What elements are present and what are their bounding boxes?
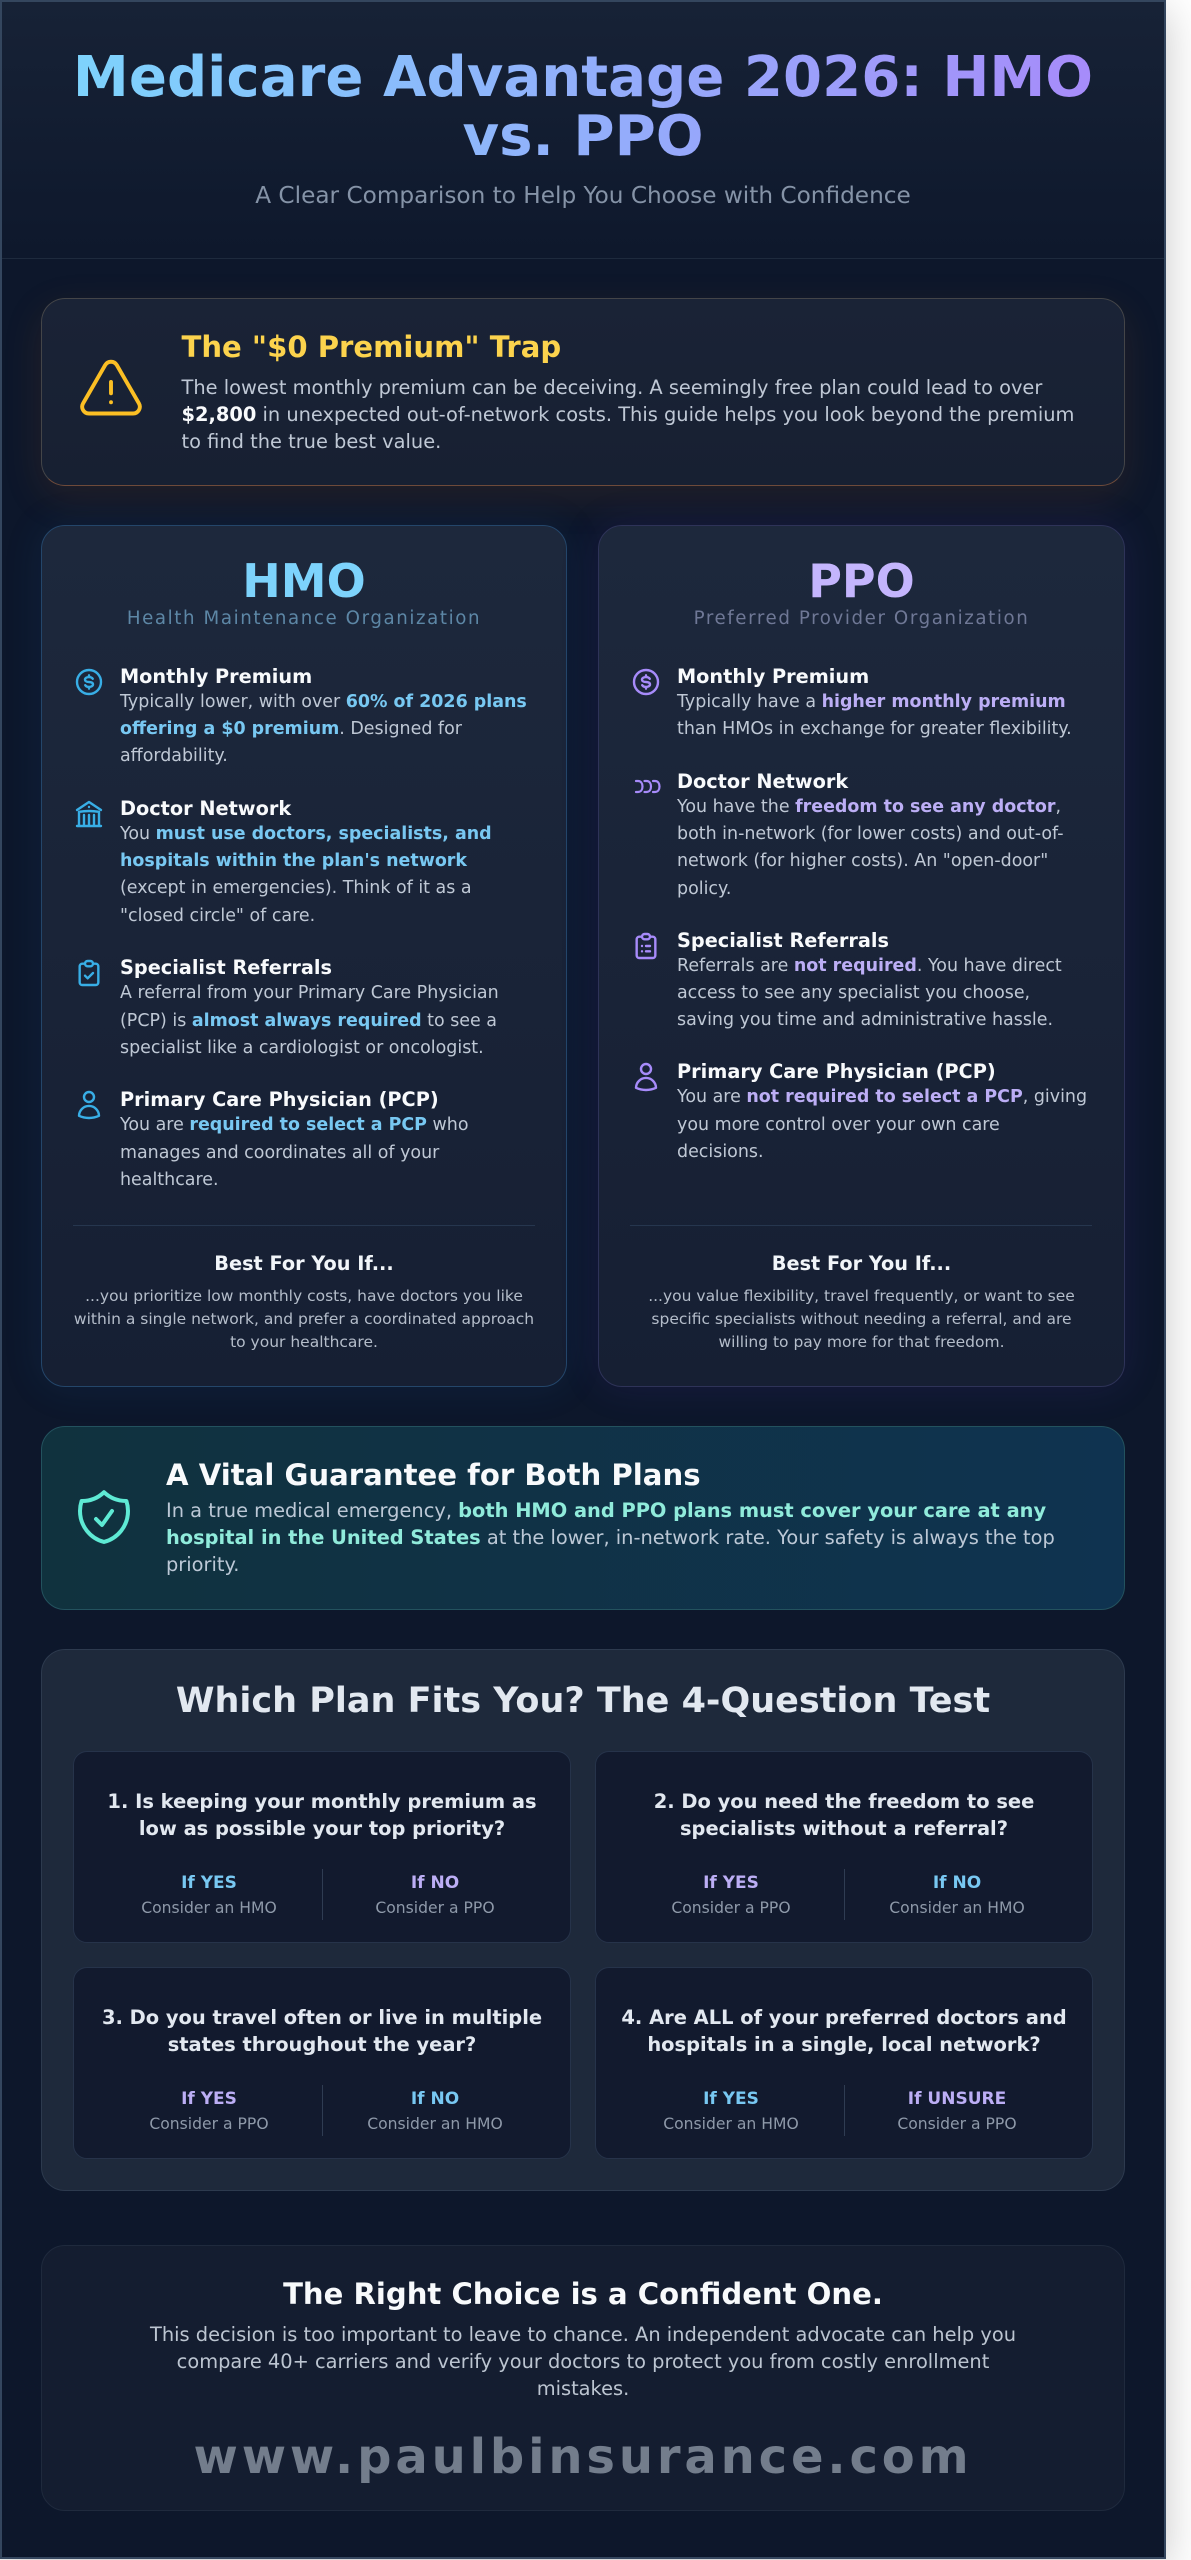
- answer: yes: Consider an HMO: [663, 2114, 799, 2132]
- item text: offering a $0 premium. Designed for: [120, 719, 462, 739]
- item title: Monthly Premium: [677, 664, 869, 688]
- item text: healthcare.: [120, 1170, 219, 1190]
- answer: unsure: If UNSURE: [908, 2088, 1006, 2108]
- item text: hospitals within the plan's network: [120, 851, 467, 871]
- answer: no: [889, 1872, 1025, 1916]
- question 3: [73, 1967, 571, 2159]
- question text: [654, 1790, 1034, 1840]
- HMO full name: Health Maintenance Organization: [127, 608, 481, 628]
- item text: access to see any specialist you choose,: [677, 983, 1030, 1003]
- item text: You must use doctors, specialists, and: [120, 824, 492, 844]
- subtitle: A Clear Comparison to Help You Choose with Confidence: [255, 182, 911, 209]
- icon: user: [78, 1090, 100, 1120]
- best-for heading: Best For You If...: [214, 1252, 394, 1275]
- trap heading: The "$0 Premium" Trap: [182, 330, 561, 364]
- icon: dollar: [76, 668, 102, 696]
- question text: 4. Are ALL of your preferred doctors and: [621, 2006, 1067, 2029]
- item text: [676, 692, 1072, 739]
- item text: You are required to select a PCP who: [120, 1115, 468, 1135]
- icon: clipboard check: [78, 960, 100, 986]
- best-for text: willing to pay more for that freedom.: [718, 1333, 1005, 1351]
- question text: 1. Is keeping your monthly premium as: [107, 1790, 537, 1813]
- trap body text: The lowest monthly premium can be deceiving. A seemingly free plan could lead to over: [182, 376, 1042, 398]
- answer: yes: If YES: [181, 1872, 237, 1892]
- item text: network (for higher costs). An "open-door": [677, 851, 1048, 871]
- HMO heading: HMO: [242, 554, 366, 608]
- item text: You have the freedom to see any doctor,: [677, 797, 1061, 817]
- item text: [120, 824, 492, 926]
- item text: decisions.: [677, 1142, 764, 1162]
- website URL: www.paulbinsurance.com: [194, 2428, 972, 2484]
- guarantee text: hospital in the United States at the lower, in-network rate. Your safety is always the top: [166, 1526, 1055, 1549]
- HMO: primary care physician: [78, 1088, 468, 1190]
- answer: no: Consider an HMO: [367, 2114, 503, 2132]
- answer: no: [367, 2088, 503, 2132]
- item text: A referral from your Primary Care Physician: [120, 983, 499, 1003]
- item text: (PCP) is almost always required to see a: [120, 1011, 497, 1031]
- question text: low as possible your top priority?: [139, 1817, 505, 1840]
- question text: 3. Do you travel often or live in multiple: [102, 2006, 542, 2029]
- best-for text: within a single network, and prefer a coordinated approach: [74, 1310, 534, 1328]
- item text: [677, 1087, 1087, 1162]
- best-for text: [648, 1286, 1075, 1351]
- item title: Doctor Network: [120, 796, 291, 820]
- panel: closing call to action: [41, 2245, 1125, 2511]
- trap body text: [181, 376, 1074, 452]
- answer: no: [375, 1872, 495, 1916]
- PPO heading: PPO: [808, 554, 915, 608]
- closing heading: The Right Choice is a Confident One.: [283, 2277, 883, 2311]
- item title: Specialist Referrals: [677, 928, 889, 952]
- item text: [120, 983, 499, 1058]
- item text: [120, 692, 527, 766]
- item text: Typically have a higher monthly premium: [677, 692, 1066, 712]
- item text: (except in emergencies). Think of it as a: [120, 878, 472, 898]
- PPO: doctor network: [634, 770, 1064, 899]
- PPO: specialist referrals: [635, 928, 1062, 1030]
- question 4: [595, 1967, 1093, 2159]
- guarantee heading: A Vital Guarantee for Both Plans: [166, 1458, 701, 1492]
- item title: Monthly Premium: [120, 664, 312, 688]
- closing text: This decision is too important to leave to chance. An independent advocate can help you: [150, 2322, 1016, 2346]
- closing text: compare 40+ carriers and verify your doctors to protect you from costly enrollment: [177, 2350, 989, 2372]
- title: [68, 49, 1098, 166]
- question 1: [73, 1751, 571, 1943]
- question text: states throughout the year?: [168, 2033, 476, 2056]
- answer: yes: If YES: [703, 2088, 759, 2108]
- item text: specialist like a cardiologist or oncologist.: [120, 1038, 484, 1058]
- question text: specialists without a referral?: [680, 1817, 1008, 1840]
- answer: yes: [141, 1872, 277, 1916]
- best-for heading: Best For You If...: [772, 1252, 951, 1275]
- HMO: specialist referrals: [78, 956, 499, 1058]
- item text: policy.: [677, 879, 731, 899]
- item text: [677, 956, 1062, 1030]
- item text: "closed circle" of care.: [120, 906, 315, 926]
- item title: Primary Care Physician (PCP): [120, 1088, 439, 1111]
- panel: 4-question test: [41, 1649, 1125, 2191]
- item text: Typically lower, with over 60% of 2026 plans: [120, 692, 527, 712]
- icon: clipboard list: [635, 932, 657, 960]
- question text: [621, 2006, 1067, 2056]
- answer: no: If NO: [933, 1872, 981, 1892]
- best-for text: to your healthcare.: [230, 1333, 378, 1351]
- item text: You are not required to select a PCP, giving: [677, 1087, 1087, 1107]
- HMO: monthly premium: [76, 664, 527, 766]
- panel: PPO: [598, 525, 1125, 1387]
- item text: both in-network (for lower costs) and out-of-: [677, 824, 1064, 844]
- item text: [120, 1115, 468, 1190]
- icon: open network arcs: [634, 780, 661, 794]
- answer: unsure: [857, 2086, 1057, 2136]
- icon: warning triangle: [80, 360, 142, 416]
- question text: [102, 2006, 542, 2056]
- question text: 2. Do you need the freedom to see: [654, 1790, 1034, 1813]
- guarantee text: [166, 1498, 1055, 1576]
- answer: unsure: Consider a PPO: [897, 2114, 1017, 2132]
- best-for text: [74, 1286, 534, 1351]
- closing text: [42, 2320, 1124, 2402]
- item text: than HMOs in exchange for greater flexibility.: [677, 719, 1072, 739]
- title: vs. PPO: [462, 104, 704, 168]
- item title: Primary Care Physician (PCP): [677, 1060, 996, 1083]
- answer: yes: Consider a PPO: [671, 1898, 791, 1916]
- trap body text: $2,800 in unexpected out-of-network costs. This guide helps you look beyond the premium: [182, 402, 1074, 426]
- item text: Referrals are not required. You have direct: [677, 956, 1062, 976]
- answer: no: If NO: [411, 2088, 459, 2108]
- icon: shield check: [78, 1490, 130, 1544]
- quiz heading: Which Plan Fits You? The 4-Question Test: [176, 1681, 990, 1721]
- item text: affordability.: [120, 746, 228, 766]
- question 2: [595, 1751, 1093, 1943]
- HMO: doctor network: [76, 796, 492, 926]
- answer: yes: Consider an HMO: [141, 1898, 277, 1916]
- question text: [107, 1790, 537, 1840]
- icon: user: [634, 1062, 658, 1092]
- answer: yes: [631, 2086, 831, 2136]
- answer: yes: Consider a PPO: [149, 2114, 269, 2132]
- closing text: mistakes.: [537, 2376, 629, 2400]
- answer: yes: [671, 1872, 791, 1916]
- title: Medicare Advantage 2026: HMO: [73, 45, 1093, 110]
- guarantee text: priority.: [166, 1553, 239, 1576]
- answer: no: Consider an HMO: [889, 1898, 1025, 1916]
- trap body text: to find the true best value.: [182, 430, 441, 452]
- best-for text: specific specialists without needing a referral, and are: [651, 1310, 1072, 1328]
- answer: no: If NO: [411, 1872, 459, 1892]
- best-for text: ...you value flexibility, travel frequently, or want to see: [648, 1286, 1075, 1304]
- item text: you more control over your own care: [677, 1115, 1000, 1135]
- item title: Doctor Network: [677, 770, 848, 792]
- question text: hospitals in a single, local network?: [647, 2033, 1041, 2056]
- item text: manages and coordinates all of your: [120, 1143, 439, 1163]
- best-for text: ...you prioritize low monthly costs, have doctors you like: [85, 1286, 523, 1304]
- PPO: monthly premium: [632, 664, 1072, 739]
- PPO: primary care physician: [634, 1060, 1087, 1162]
- item text: [677, 797, 1064, 899]
- header band: [2, 2, 1164, 259]
- item title: Specialist Referrals: [120, 956, 332, 979]
- panel: HMO: [41, 525, 567, 1387]
- panel: $0 premium trap callout: [41, 298, 1125, 486]
- icon: dollar: [632, 668, 660, 696]
- answer: no: Consider a PPO: [375, 1898, 495, 1916]
- answer: yes: If YES: [703, 1872, 759, 1892]
- guarantee text: In a true medical emergency, both HMO and PPO plans must cover your care at any: [166, 1498, 1046, 1522]
- icon: building: [76, 800, 102, 828]
- panel: vital guarantee: [41, 1426, 1125, 1610]
- PPO full name: Preferred Provider Organization: [694, 608, 1029, 628]
- answer: yes: If YES: [181, 2088, 237, 2108]
- item text: saving you time and administrative hassle.: [677, 1010, 1053, 1030]
- answer: yes: [149, 2088, 269, 2132]
